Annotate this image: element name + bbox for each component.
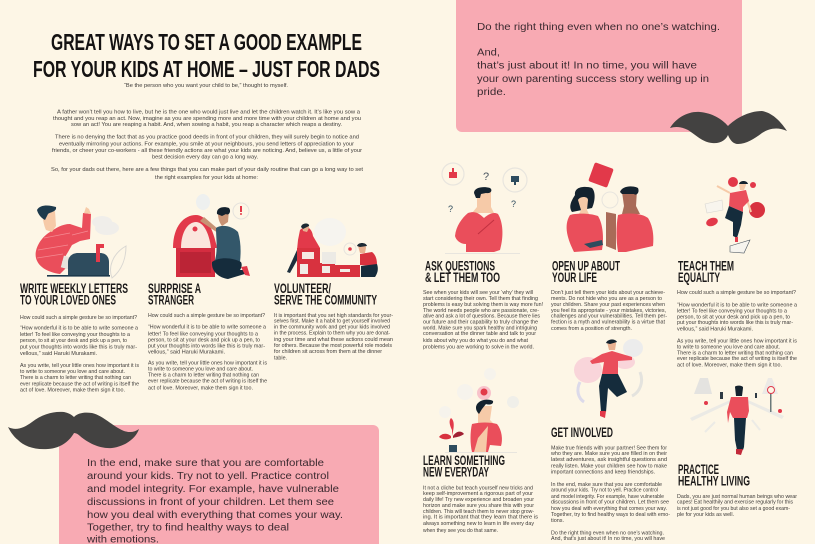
text: surprise a stranger: person, to sit at your desk and pick up a pen, to bbox=[148, 338, 260, 344]
heading: surprise a stranger: SURPRISE A bbox=[148, 281, 201, 296]
text: surprise a stranger: to write to someone you love and care about. bbox=[148, 367, 253, 373]
illustration: man asking questions: ? bbox=[511, 199, 516, 209]
text: write weekly letters: vellous,” said Haruki Murakami. bbox=[20, 351, 97, 357]
panel: top pink callout: Do the right thing even when no one’s watching. bbox=[477, 22, 720, 33]
text: write weekly letters: “How wonderful it is to be able to write someone a bbox=[20, 326, 138, 332]
text: surprise a stranger: There is a charm to letter writing that nothing can bbox=[148, 373, 259, 379]
heading: learn something bbox=[423, 453, 505, 480]
text: volunteer: It is important that you set high standards for your- bbox=[274, 313, 393, 319]
illustration: man asking questions bbox=[442, 163, 527, 254]
panel: top pink callout: your own parenting success story welling up in bbox=[477, 74, 709, 85]
text: ask questions bbox=[422, 290, 543, 350]
heading: learn something: NEW EVERYDAY bbox=[423, 465, 489, 480]
intro text: A father won’t tell you how to live, but he is the one who would just live and let the children watch it. It’s like you sow a bbox=[57, 110, 360, 116]
text: write weekly letters: letter! To feel like conveying your thoughts to a bbox=[20, 332, 130, 338]
text: practice healthy living: is not just good for you but also set a good exam- bbox=[677, 506, 790, 512]
heading: open up: OPEN UP ABOUT bbox=[552, 259, 620, 274]
panel: bottom pink callout: Together, try to find healthy ways to deal bbox=[87, 523, 289, 534]
text: teach them: to write to someone you love and care about. bbox=[677, 344, 780, 350]
text: write weekly letters: to write to someone you love and care about. bbox=[20, 369, 125, 375]
icon: moustache top right bbox=[670, 111, 787, 144]
text: ask questions: our future and their capability to truly change the bbox=[423, 320, 538, 326]
text: volunteer: in the community work and get your kids involved bbox=[274, 324, 390, 330]
text: teach them: How could such a simple gesture be so important? bbox=[677, 290, 796, 296]
illustration: couple talking bbox=[567, 162, 653, 252]
text: volunteer: for children sit across from them at the dinner bbox=[274, 349, 382, 355]
text: get involved: In the end, make sure that you are comfortable bbox=[551, 482, 662, 488]
heading: write weekly letters: TO YOUR LOVED ONES bbox=[20, 292, 116, 308]
panel: top pink callout bbox=[456, 0, 742, 132]
text: ask questions: conversation at the dinner table and talk to your bbox=[423, 331, 536, 337]
illustration: man opening red house box bbox=[173, 194, 250, 279]
heading: teach them: TEACH THEM bbox=[678, 259, 734, 274]
text: ask questions: start considering their own. Tell them that finding bbox=[423, 296, 538, 302]
text: practice healthy living: ple for your kids as well. bbox=[677, 512, 734, 518]
heading: volunteer: VOLUNTEER/ bbox=[274, 281, 331, 296]
text: surprise a stranger: act of love. Moreover, make them sign it too. bbox=[148, 386, 253, 392]
text: ask questions: problems you are working to solve in the world. bbox=[423, 344, 534, 350]
text: learn something: always something new to learn in life every day bbox=[423, 521, 534, 527]
heading: open up: YOUR LIFE bbox=[552, 270, 597, 285]
intro text: best decision every day can go a long way. bbox=[152, 155, 258, 161]
text: write weekly letters: As you write, tell your little ones how important it is bbox=[20, 363, 139, 369]
panel: bottom pink callout: how you deal with everything that comes your way. bbox=[87, 510, 343, 521]
text: ask questions: problems is easy but solving them is way more fun! bbox=[423, 302, 543, 308]
text: learn something: daily life! Try new experience and broaden your bbox=[423, 497, 534, 503]
text: teach them: “How wonderful it is to be able to write someone a bbox=[677, 302, 797, 308]
heading: ask questions: ASK QUESTIONS bbox=[425, 259, 495, 274]
text: surprise a stranger: letter! To feel like conveying your thoughts to a bbox=[148, 332, 258, 338]
text: teach them: put your thoughts into words like this is truly mar- bbox=[677, 320, 793, 326]
text: teach them: vellous,” said Haruki Murakami. bbox=[677, 327, 753, 333]
intro text: eventually mirroring your actions. For example, you smile at your neighbours, you send letters of appreciation to your bbox=[59, 142, 354, 148]
text: volunteer: ing your time and what these actions could mean bbox=[274, 337, 393, 343]
text: learn something: It not a cliche but teach yourself new tricks and bbox=[423, 486, 533, 492]
heading: open up bbox=[552, 259, 620, 285]
text: open up: Don’t just tell them your kids about your achieve- bbox=[551, 290, 665, 296]
text: learn something bbox=[422, 486, 538, 534]
intro text: thought and you reap an act. Now, imagine as you are spending more and more time with your children at home and you bbox=[53, 116, 361, 122]
panel: top pink callout: pride. bbox=[477, 87, 506, 98]
text: write weekly letters: How could such a simple gesture be so important? bbox=[20, 315, 137, 321]
heading: ask questions bbox=[425, 259, 500, 285]
text: learn something: children. This will teach them to never stop grow- bbox=[423, 509, 534, 515]
intro text bbox=[51, 110, 364, 181]
intro text: friends, or cheer your co-workers - all these friendly actions are what your kids are noticing. And, believe us, a little of your bbox=[52, 148, 362, 154]
text: ask questions: kids about why you do what you do and what bbox=[423, 338, 528, 344]
text: teach them bbox=[677, 290, 797, 369]
panel: bottom pink callout: discussions in front of your children. Let them see bbox=[87, 497, 334, 508]
text: teach them: As you write, tell your little ones how important it is bbox=[677, 338, 797, 344]
text: open up: challenges and your vulnerabilities. Tell them per- bbox=[551, 314, 667, 320]
text: get involved: And, that’s just about it! In no time, you will have bbox=[551, 536, 665, 542]
text: teach them: letter! To feel like conveying your thoughts to a bbox=[677, 308, 787, 314]
text: surprise a stranger: put your thoughts into words like this is truly mar- bbox=[148, 344, 265, 350]
text: learn something: keep self-improvement a rigorous part of your bbox=[423, 491, 533, 497]
heading: get involved: GET INVOLVED bbox=[551, 425, 613, 440]
heading: write weekly letters: WRITE WEEKLY LETTERS bbox=[20, 281, 128, 296]
text: open up: fection is a myth and vulnerability is a virtue that bbox=[551, 320, 665, 326]
text: ask questions: world. Make sure you spark healthy and intriguing bbox=[422, 326, 537, 332]
text: open up: comes from a position of strength. bbox=[551, 326, 632, 332]
text: ask questions: ative and ask a lot of questions. Because there lies bbox=[423, 314, 540, 320]
text: get involved: around your kids. Try not to yell. Practice control bbox=[551, 488, 658, 494]
text: open up: you feel its appropriate - your mistakes, victories, bbox=[551, 308, 666, 314]
text: surprise a stranger: ever replicate because the act of writing is itself the bbox=[148, 379, 267, 385]
text: surprise a stranger bbox=[148, 313, 267, 392]
text: learn something: ing. It is important that they learn that there is bbox=[423, 514, 538, 520]
panel: top pink callout: And, bbox=[477, 48, 500, 58]
text: learn something: horizon and make sure you share this with your bbox=[423, 503, 534, 509]
text: volunteer: table. bbox=[274, 356, 287, 362]
heading: practice healthy living bbox=[678, 462, 750, 489]
text: surprise a stranger: “How wonderful it is to be able to write someone a bbox=[148, 324, 266, 330]
heading: surprise a stranger bbox=[148, 281, 201, 308]
text: get involved: who they are. Make sure you are filled in on their bbox=[550, 451, 667, 457]
title: FOR YOUR KIDS AT HOME – JUST FOR DADS bbox=[33, 56, 380, 82]
illustration: man walking on road bbox=[690, 378, 784, 455]
intro text: sow an act! You are reaping a habit. And, when sowing a habit, you reap a character which reaps a destiny. bbox=[71, 122, 342, 128]
illustration: volunteers packing boxes bbox=[287, 218, 378, 277]
text: surprise a stranger: How could such a simple gesture be so important? bbox=[148, 313, 265, 319]
text: get involved bbox=[550, 446, 670, 542]
text: ask questions: See when your kids will see your ‘why’ they will bbox=[423, 290, 533, 296]
illustration: man writing letter at mailbox bbox=[36, 205, 126, 278]
text: write weekly letters: person, to sit at your desk and pick up a pen, to bbox=[20, 338, 127, 344]
heading: teach them: EQUALITY bbox=[678, 270, 720, 285]
heading: volunteer: SERVE THE COMMUNITY bbox=[274, 292, 377, 308]
heading: practice healthy living: PRACTICE bbox=[678, 462, 719, 477]
intro text: the right examples for your kids at home: bbox=[155, 175, 258, 181]
heading: ask questions: & LET THEM TOO bbox=[425, 270, 500, 285]
panel: top pink callout: that’s just about it! In no time, you will have bbox=[477, 60, 698, 72]
text: practice healthy living bbox=[677, 494, 797, 518]
text: get involved: Together, try to find healthy ways to deal with emo- bbox=[551, 512, 670, 518]
text: ask questions: The world needs people who are passionate, cre- bbox=[423, 308, 539, 314]
subtitle quote: “Be the person who you want your child to be,” thought to myself. bbox=[124, 83, 288, 89]
text: open up bbox=[551, 290, 667, 332]
text: surprise a stranger: vellous,” said Haruki Murakami. bbox=[148, 350, 225, 356]
panel: bottom pink callout: and model integrity. For example, have vulnerable bbox=[87, 484, 339, 495]
text: teach them: There is a charm to letter writing that nothing can bbox=[677, 350, 793, 356]
heading: write weekly letters bbox=[20, 281, 128, 308]
text: write weekly letters: put your thoughts into words like this is truly mar- bbox=[20, 344, 137, 350]
text: write weekly letters: act of love. Moreover, make them sign it too. bbox=[20, 388, 125, 394]
text: write weekly letters bbox=[20, 315, 139, 394]
panel: bottom pink callout bbox=[59, 425, 379, 544]
text: get involved: latest adventures, ask insightful questions and bbox=[551, 457, 667, 463]
illustration: man asking questions: ? bbox=[448, 204, 453, 214]
heading: practice healthy living: HEALTHY LIVING bbox=[678, 474, 750, 489]
heading: teach them bbox=[678, 259, 734, 285]
icon: moustache bottom left bbox=[8, 412, 139, 449]
text: teach them: person, to sit at your desk and pick up a pen, to bbox=[677, 314, 790, 320]
text: volunteer: selves first. Make it a habit to get yourself involved bbox=[274, 318, 390, 324]
intro text: There is no denying the fact that as you practice good deeds in front of your children, they will surely begin to notice and bbox=[55, 135, 359, 141]
text: surprise a stranger: As you write, tell your little ones how important it is bbox=[148, 361, 267, 367]
text: get involved: really listen. Make your children see how to make bbox=[551, 464, 667, 470]
text: volunteer bbox=[274, 313, 393, 362]
text: teach them: act of love. Moreover, make them sign it too. bbox=[677, 363, 782, 369]
panel: bottom pink callout: around your kids. Try not to yell. Practice control bbox=[87, 471, 329, 482]
panel: bottom pink callout: In the end, make sure that you are comfortable bbox=[87, 458, 324, 469]
text: practice healthy living: Dads, you are just normal human beings who wear bbox=[677, 494, 797, 500]
text: get involved: discussions in front of your children. Let them see bbox=[551, 500, 669, 506]
text: practice healthy living: capes! Eat healthily and exercise regularly for this bbox=[677, 500, 793, 506]
text: get involved: tions. bbox=[551, 518, 564, 524]
illustration: man asking questions: ? bbox=[483, 171, 489, 183]
heading: volunteer bbox=[274, 281, 377, 308]
text: get involved: important connections and keep friendships. bbox=[551, 470, 655, 476]
text: get involved: Do the right thing even when no one’s watching. bbox=[551, 530, 664, 536]
text: volunteer: for others. Because the most powerful role models bbox=[274, 343, 392, 349]
text: get involved: how you deal with everything that comes your way. bbox=[551, 506, 667, 512]
text: volunteer: in the process. Explain to them why you are donat- bbox=[274, 330, 390, 336]
text: teach them: ever replicate because the act of writing is itself the bbox=[677, 356, 797, 362]
text: learn something: when they see you do that same. bbox=[422, 528, 498, 534]
text: get involved: and model integrity. For example, have vulnerable bbox=[551, 494, 664, 500]
text: write weekly letters: ever replicate because the act of writing is itself the bbox=[20, 382, 139, 388]
text: get involved: Make true friends with your partner! See them for bbox=[551, 446, 667, 452]
text: open up: ments. Do not hide who you are as a person to bbox=[551, 296, 662, 302]
text: open up: your children. Share your past experiences when bbox=[551, 302, 665, 308]
heading: surprise a stranger: STRANGER bbox=[148, 292, 194, 308]
title bbox=[33, 29, 380, 82]
title: GREAT WAYS TO SET A GOOD EXAMPLE bbox=[51, 29, 362, 55]
illustration: man with red shirt getting involved bbox=[574, 339, 643, 418]
illustration: man thinking with plant bbox=[439, 368, 519, 453]
text: write weekly letters: There is a charm to letter writing that nothing can bbox=[20, 375, 131, 381]
intro text: So, for your dads out there, here are a few things that you can make part of your daily routine that can go a long way to set bbox=[51, 167, 364, 173]
heading: learn something: LEARN SOMETHING bbox=[423, 453, 505, 468]
illustration: man jumping with balloons bbox=[705, 177, 765, 253]
